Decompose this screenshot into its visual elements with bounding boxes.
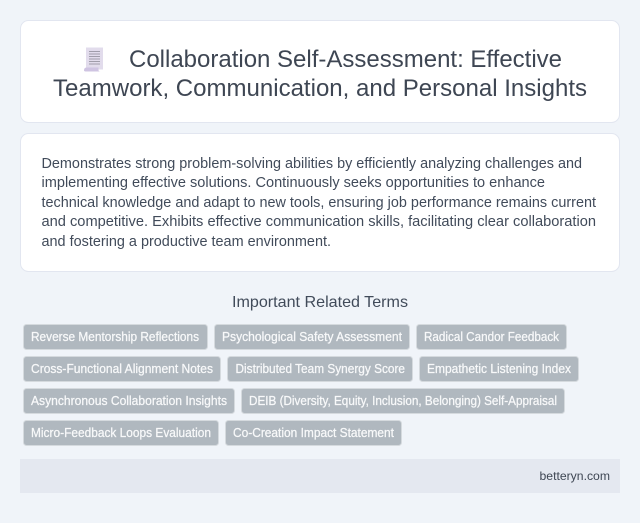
- panel: description: [20, 134, 620, 272]
- tag: micro-feedback: [24, 420, 218, 446]
- tag: psychological safety: [214, 324, 410, 350]
- tag: psychological safety: Psychological Safety Assessment: [222, 330, 403, 344]
- tag: asynchronous collaboration: Asynchronous Collaboration Insights: [31, 394, 227, 408]
- tag list: [24, 324, 578, 446]
- title: Collaboration Self-Assessment: Effective: [129, 46, 562, 73]
- tag: micro-feedback: Micro-Feedback Loops Evaluation: [31, 426, 211, 440]
- text block: description: Demonstrates strong problem-solving abilities by efficiently analyzing challenges and: [42, 156, 582, 172]
- tag: radical candor: [416, 324, 566, 350]
- text block: description: implementing effective solutions. Continuously seeks opportunities to enhance: [42, 175, 545, 191]
- tag: DEIB: DEIB (Diversity, Equity, Inclusion, Belonging) Self-Appraisal: [249, 394, 557, 408]
- tag: asynchronous collaboration: [24, 388, 234, 414]
- tag: distributed team: [228, 356, 412, 382]
- text block: description: technical knowledge and adapt to new tools, ensuring job performance remains current: [42, 195, 596, 211]
- tag: empathetic listening: [420, 356, 578, 382]
- tag: reverse mentorship: [24, 324, 208, 350]
- tag: co-creation: [226, 420, 402, 446]
- tag: cross-functional: Cross-Functional Alignment Notes: [31, 362, 213, 376]
- tag: distributed team: Distributed Team Synergy Score: [236, 362, 405, 376]
- tag: reverse mentorship: Reverse Mentorship Reflections: [31, 330, 199, 344]
- text block: description: and fostering a productive team environment.: [42, 234, 331, 250]
- heading: important related terms: Important Related Terms: [232, 294, 408, 311]
- tag: radical candor: Radical Candor Feedback: [424, 330, 560, 344]
- panel: title card: [20, 20, 620, 122]
- text block: description: [42, 156, 596, 250]
- footer: [20, 459, 620, 493]
- title: [53, 46, 587, 102]
- title: Teamwork, Communication, and Personal Insights: [53, 75, 587, 102]
- tag: co-creation: Co-Creation Impact Statement: [233, 426, 394, 440]
- footer source: betteryn.com: [540, 469, 610, 483]
- text block: description: and competitive. Exhibits effective communication skills, facilitating clear collaboration: [42, 214, 596, 230]
- tag: DEIB: [242, 388, 564, 414]
- tag: cross-functional: [24, 356, 220, 382]
- icon: paper scroll: [84, 48, 103, 72]
- tag: empathetic listening: Empathetic Listening Index: [427, 362, 572, 376]
